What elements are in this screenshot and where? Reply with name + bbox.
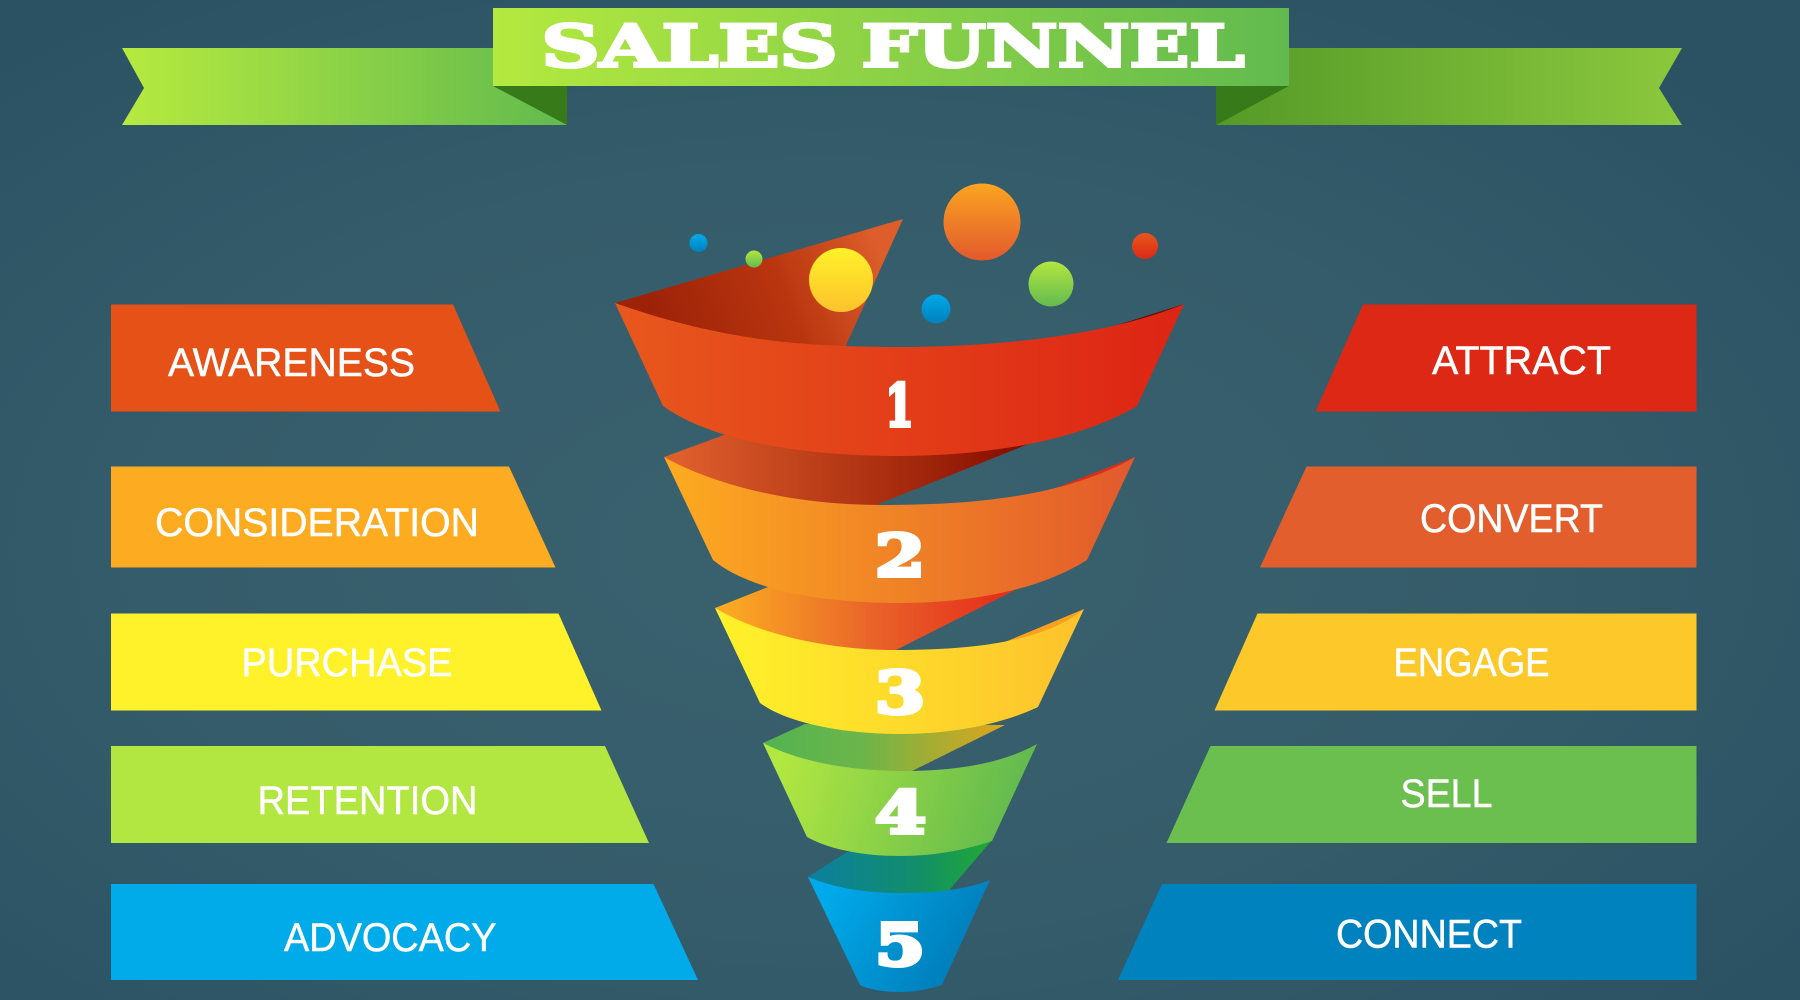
funnel band 4 bbox=[763, 743, 1037, 856]
left label: PURCHASE bbox=[111, 614, 602, 710]
title banner bbox=[122, 8, 1682, 125]
inner flap 4 bbox=[763, 724, 1005, 773]
banner left tail bbox=[122, 48, 567, 125]
left label: RETENTION: RETENTION bbox=[258, 779, 478, 823]
funnel band 5: 5 bbox=[875, 911, 925, 979]
small blue ball bbox=[690, 234, 708, 252]
funnel band 4: 4 bbox=[875, 779, 926, 847]
left label: CONSIDERATION bbox=[111, 466, 556, 568]
small green ball bbox=[746, 250, 762, 268]
blue ball bbox=[922, 294, 950, 324]
funnel band 5 bbox=[808, 877, 990, 992]
back flap of funnel top bbox=[615, 219, 903, 352]
banner right tail bbox=[1216, 48, 1682, 125]
title text bbox=[542, 12, 1244, 80]
right label: CONNECT bbox=[1118, 884, 1696, 980]
right label: CONNECT: CONNECT bbox=[1336, 912, 1522, 956]
right label: ENGAGE: ENGAGE bbox=[1394, 641, 1550, 685]
funnel band 1 bbox=[615, 303, 1184, 456]
funnel band 3: 3 bbox=[875, 659, 925, 727]
right label: CONVERT: CONVERT bbox=[1420, 497, 1603, 541]
left label: ADVOCACY bbox=[111, 884, 698, 980]
left label: CONSIDERATION: CONSIDERATION bbox=[155, 501, 479, 545]
left label: PURCHASE: PURCHASE bbox=[242, 641, 452, 685]
balls entering funnel bbox=[615, 184, 1158, 352]
funnel band 2: 2 bbox=[875, 522, 925, 590]
left label: RETENTION bbox=[111, 746, 649, 843]
banner centre bbox=[493, 8, 1289, 86]
red sliver band 2 bbox=[1020, 457, 1135, 502]
funnel band 2 bbox=[664, 457, 1135, 603]
inner flap 2 bbox=[664, 431, 1031, 507]
right label: ENGAGE bbox=[1214, 614, 1696, 710]
funnel bbox=[615, 303, 1184, 992]
banner left fold bbox=[493, 86, 567, 125]
dark sliver band 1 bbox=[1095, 304, 1184, 332]
red ball bbox=[1132, 233, 1158, 259]
inner flap 5 bbox=[808, 840, 992, 900]
right label: SELL bbox=[1166, 746, 1696, 843]
inner flap 3 bbox=[715, 587, 1015, 652]
yellow ball bbox=[809, 248, 873, 312]
funnel band 1: 1 bbox=[886, 372, 914, 440]
title text: FUNNEL bbox=[862, 12, 1244, 80]
funnel band 3 bbox=[715, 608, 1084, 734]
right label: ATTRACT: ATTRACT bbox=[1432, 339, 1611, 383]
right label: ATTRACT bbox=[1316, 304, 1696, 412]
banner right fold bbox=[1216, 86, 1289, 125]
green ball bbox=[1028, 262, 1074, 306]
right label: SELL: SELL bbox=[1400, 772, 1492, 816]
left label: AWARENESS bbox=[111, 304, 500, 412]
right label: CONVERT bbox=[1260, 466, 1696, 568]
title text: SALES bbox=[542, 12, 838, 80]
left label: AWARENESS: AWARENESS bbox=[168, 341, 415, 385]
orange sliver band 3 bbox=[1005, 609, 1084, 642]
orange ball bbox=[944, 184, 1020, 260]
left label: ADVOCACY: ADVOCACY bbox=[284, 916, 496, 960]
